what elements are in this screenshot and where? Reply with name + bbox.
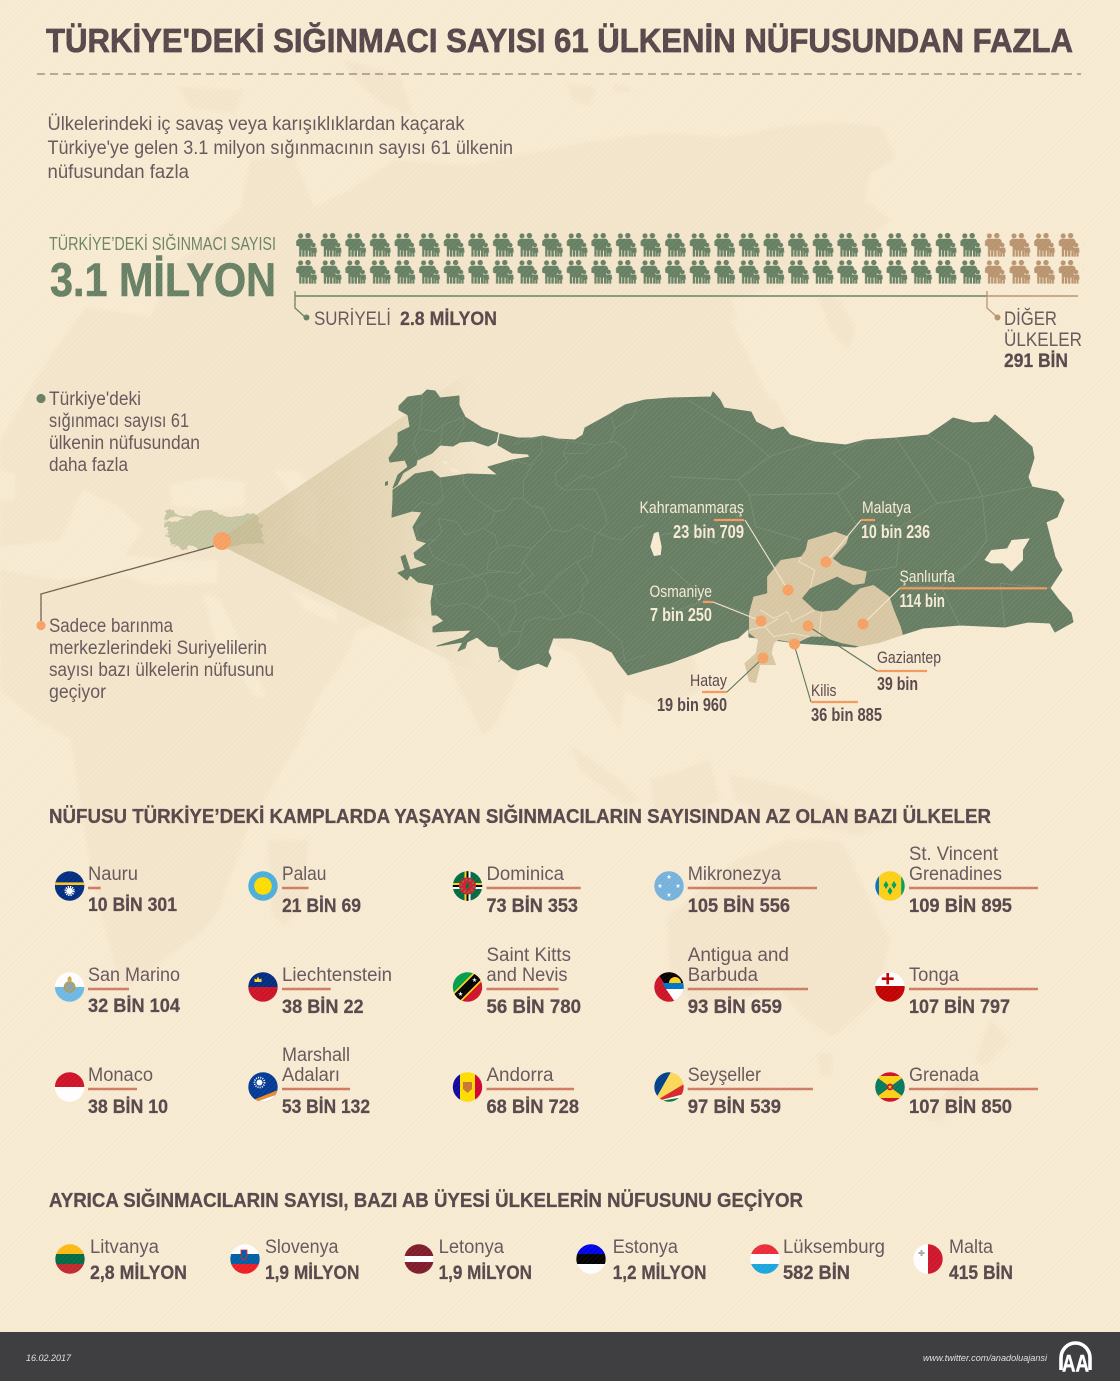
intro text: Ülkelerindeki iç savaş veya karışıklıklardan kaçarak [48,114,465,135]
country: Antigua and Barbuda: Antigua and [688,945,789,966]
map label: Şanlıurfa: 114 bin [900,591,945,611]
map label: Gaziantep [802,620,941,694]
footer bar: www.twitter.com/anadoluajansi [923,1353,1048,1364]
pictogram: other countries [985,233,1083,284]
country: Tonga [875,968,1038,1014]
country: Letonya: Letonya [439,1237,504,1258]
footer bar: 16.02.2017 [26,1353,72,1363]
map label: Kahramanmaraş: Kahramanmaraş [640,498,744,517]
bracket: other countries [987,291,1082,372]
country: Estonya: 1,2 MİLYON [613,1263,706,1284]
callout: shelter centres: Sadece barınma [49,616,173,637]
map label: Malatya: 10 bin 236 [861,522,930,542]
country: Malta [913,1239,1012,1280]
map label: Malatya: Malatya [862,498,911,517]
map label: Kahramanmaraş [640,498,794,596]
map label: Kilis: 36 bin 885 [811,705,882,725]
country: Antigua and Barbuda: 93 BİN 659 [688,997,782,1018]
Turkey map [385,390,1073,683]
bracket: Syrians: SURİYELİ [314,309,391,330]
country: Grenada [875,1067,1038,1114]
country: Monaco: 38 BİN 10 [88,1097,168,1118]
bracket: other countries: DİĞER [1004,308,1057,330]
country: Antigua and Barbuda: Barbuda [688,965,758,986]
country: Marshall Adaları: 53 BİN 132 [282,1097,370,1118]
map label: Kilis [789,638,882,725]
heading: EU countries: AYRICA SIĞINMACILARIN SAYISI, BAZI AB ÜYESİ ÜLKELERİN NÜFUSUNU GEÇİYOR [49,1188,804,1212]
logo: AA: AA [1062,1350,1089,1378]
map label: Kahramanmaraş: 23 bin 709 [673,522,744,542]
callout: shelter centres: geçiyor [49,682,107,703]
country: Monaco [54,1068,168,1114]
bracket: other countries: ÜLKELER [1004,330,1082,351]
map label: Osmaniye [650,582,766,626]
country: Slovenya: 1,9 MİLYON [265,1263,360,1284]
country: Liechtenstein [248,967,391,1014]
country: Andorra [452,1067,579,1114]
country: Slovenya [230,1237,360,1284]
map label: Şanlıurfa [858,567,1047,630]
country: Mikronezya [654,866,817,912]
intro text [48,114,513,183]
country: St. Vincent Grenadines: St. Vincent [909,844,999,865]
country: Grenada: 107 BİN 850 [909,1097,1012,1118]
country: Letonya: 1,9 MİLYON [439,1263,532,1284]
country: Letonya [404,1237,532,1284]
country: Lüksemburg: Lüksemburg [783,1237,885,1258]
bracket: Syrians [295,291,987,330]
country: Palau: 21 BİN 69 [282,896,361,917]
country: Nauru: 10 BİN 301 [88,895,177,916]
country: St. Vincent Grenadines [875,844,1038,917]
map label: Hatay [657,652,768,715]
country: St. Vincent Grenadines: Grenadines [909,864,1002,885]
country: Antigua and Barbuda [654,945,808,1018]
country: San Marino [54,967,180,1012]
map label: Gaziantep: Gaziantep [877,648,941,667]
map label: Hatay: 19 bin 960 [657,695,727,715]
country: Dominica: Dominica [486,864,564,885]
country: Lüksemburg [750,1239,884,1280]
note: 61 countries: Türkiye'deki [49,389,141,410]
map label: Osmaniye: 7 bin 250 [650,605,712,625]
callout: shelter centres [36,532,274,703]
country: Liechtenstein: 38 BİN 22 [282,997,364,1018]
country: Seyşeller [654,1067,813,1114]
title: TÜRKİYE'DEKİ SIĞINMACI SAYISI 61 ÜLKENİN NÜFUSUNDAN FAZLA [46,22,1073,59]
bracket: other countries: 291 BİN [1004,351,1068,372]
country: St. Vincent Grenadines: 109 BİN 895 [909,896,1012,917]
callout: shelter centres: sayısı bazı ülkelerin nüfusunu [49,660,274,681]
map label: Gaziantep: 39 bin [877,674,918,694]
country: Marshall Adaları: Marshall [282,1045,350,1066]
country: Nauru [54,866,177,912]
country: Seyşeller: Seyşeller [688,1065,762,1086]
country: Litvanya: 2,8 MİLYON [90,1263,187,1284]
callout: shelter centres: merkezlerindeki Suriyelilerin [49,638,267,659]
zoom cone [222,365,480,676]
small Turkey locator map [164,509,265,551]
bracket: Syrians: 2.8 MİLYON [400,309,497,330]
country: Malta: Malta [949,1237,993,1258]
country: Mikronezya: Mikronezya [688,864,781,885]
country: Andorra: 68 BİN 728 [486,1097,579,1118]
pictogram: Syrian refugees [296,233,985,284]
country: Palau: Palau [282,864,326,885]
total refugee count [49,233,276,306]
note: 61 countries [36,389,200,476]
country: Grenada: Grenada [909,1065,979,1086]
country: San Marino: 32 BİN 104 [88,996,180,1017]
map label: Malatya [820,498,930,568]
country: San Marino: San Marino [88,965,180,986]
country: Saint Kitts and Nevis: Saint Kitts [486,945,571,966]
country: Litvanya: Litvanya [90,1237,159,1258]
country: Mikronezya: 105 BİN 556 [688,896,790,917]
map label: Şanlıurfa: Şanlıurfa [900,567,955,586]
country: Palau [248,866,360,912]
country: Saint Kitts and Nevis: and Nevis [486,965,568,986]
country: Nauru: Nauru [88,864,138,885]
total refugee count: 3.1 MİLYON [50,253,276,306]
country: Tonga: Tonga [909,965,959,986]
country: Marshall Adaları: Adaları [282,1065,340,1086]
country: Malta: 415 BİN [949,1263,1013,1284]
country: Dominica [452,866,581,912]
country: Monaco: Monaco [88,1065,153,1086]
country: Saint Kitts and Nevis: 56 BİN 780 [486,997,581,1018]
country: Marshall Adaları [248,1045,370,1118]
heading: small countries: NÜFUSU TÜRKİYE’DEKİ KAMPLARDA YAŞAYAN SIĞINMACILARIN SAYISINDAN AZ OLAN BAZI ÜLKELER [49,804,992,828]
note: 61 countries: daha fazla [49,455,128,476]
intro text: nüfusundan fazla [48,162,189,183]
intro text: Türkiye'ye gelen 3.1 milyon sığınmacının sayısı 61 ülkenin [48,138,513,159]
country: Liechtenstein: Liechtenstein [282,965,392,986]
country: Estonya: Estonya [613,1237,678,1258]
background world map [0,60,1010,1123]
country: Saint Kitts and Nevis [452,945,581,1018]
country: Tonga: 107 BİN 797 [909,997,1010,1018]
map label: Osmaniye: Osmaniye [650,582,712,601]
footer bar [0,1332,1120,1381]
country: Andorra: Andorra [486,1065,554,1086]
country: Estonya [576,1237,706,1284]
total refugee count: TÜRKİYE’DEKİ SIĞINMACI SAYISI [49,233,276,254]
country: Dominica: 73 BİN 353 [486,896,578,917]
country: Lüksemburg: 582 BİN [783,1263,850,1284]
country: Seyşeller: 97 BİN 539 [688,1097,781,1118]
country: Litvanya [55,1237,187,1284]
map label: Kilis: Kilis [811,681,836,700]
note: 61 countries: ülkenin nüfusundan [49,433,200,454]
country: Slovenya: Slovenya [265,1237,339,1258]
logo: AA [1061,1343,1090,1378]
note: 61 countries: sığınmacı sayısı 61 [49,411,189,432]
map label: Hatay: Hatay [690,671,727,690]
